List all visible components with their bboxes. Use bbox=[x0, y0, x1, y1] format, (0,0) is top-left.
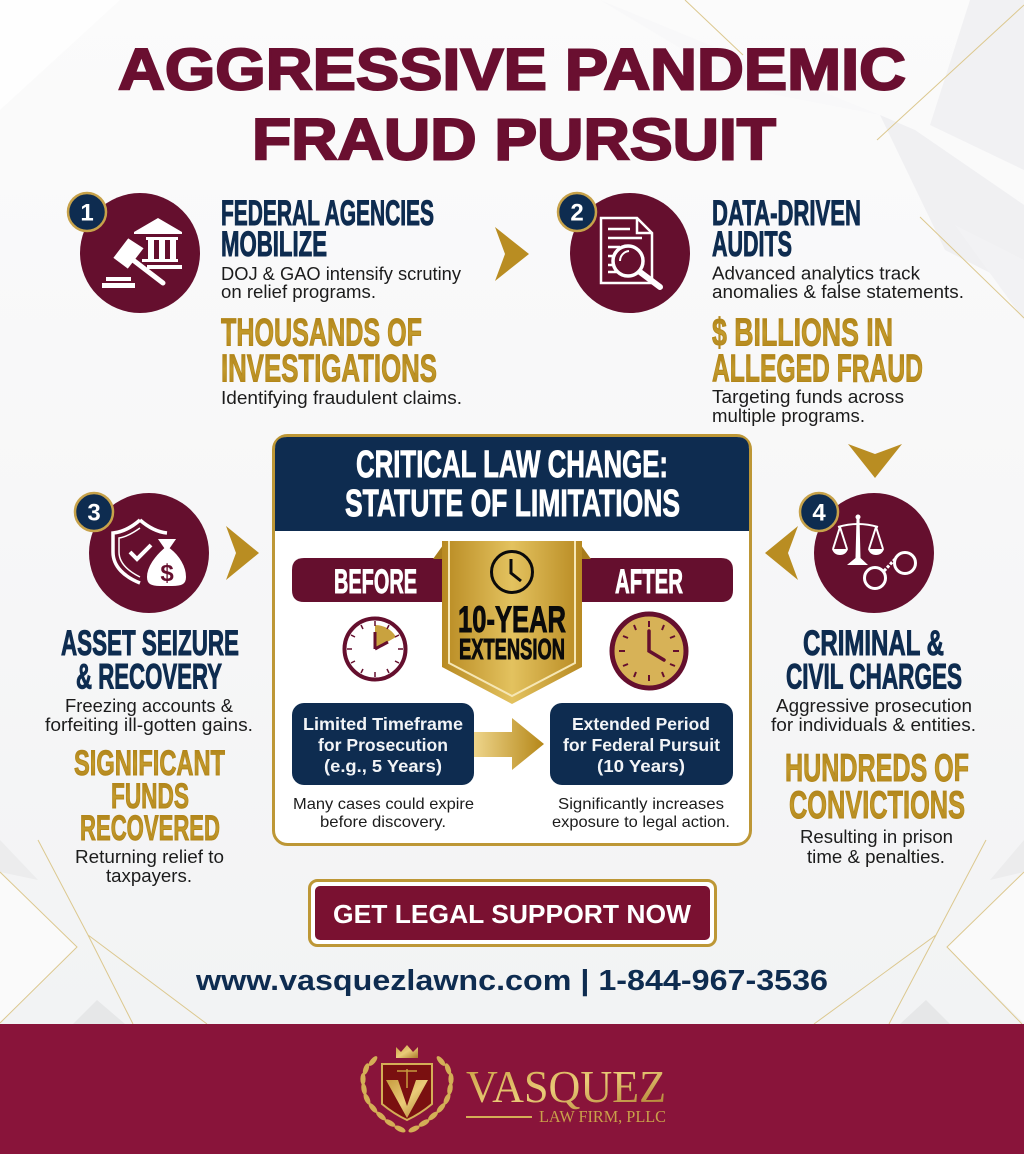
step 2 stat bbox=[712, 312, 923, 390]
step 3 stat: FUNDS bbox=[111, 777, 189, 816]
step 1 stat bbox=[221, 312, 437, 390]
step 3 heading: ASSET SEIZURE bbox=[61, 624, 239, 663]
step 4 stat note bbox=[800, 827, 953, 867]
step 3 heading bbox=[61, 624, 239, 696]
after note: exposure to legal action. bbox=[552, 814, 730, 831]
before note: Many cases could expire bbox=[293, 796, 474, 813]
after bar bbox=[582, 558, 733, 602]
after note: Significantly increases bbox=[558, 796, 724, 813]
step 1 stat: INVESTIGATIONS bbox=[221, 348, 437, 390]
step 3 stat: RECOVERED bbox=[80, 809, 220, 848]
panel header: CRITICAL LAW CHANGE: bbox=[356, 444, 668, 486]
step 2 stat: $ BILLIONS IN bbox=[712, 312, 893, 354]
step 1 heading: MOBILIZE bbox=[221, 225, 327, 264]
step 1 heading: FEDERAL AGENCIES bbox=[221, 194, 434, 233]
step 3 description: Freezing accounts & bbox=[65, 696, 233, 716]
box: extended period: Extended Period bbox=[572, 714, 710, 734]
step 2 description bbox=[712, 264, 964, 302]
step 4 badge: 4 bbox=[812, 500, 826, 526]
step 4 stat note: time & penalties. bbox=[807, 847, 945, 867]
icon: clock on badge bbox=[492, 552, 532, 592]
step 3 badge bbox=[75, 493, 113, 531]
panel: statute of limitations bbox=[274, 436, 750, 844]
before bar: BEFORE bbox=[334, 563, 417, 601]
step 1 stat: THOUSANDS OF bbox=[221, 312, 422, 354]
step 2 description: anomalies & false statements. bbox=[712, 282, 964, 302]
step 3 stat: SIGNIFICANT bbox=[74, 744, 225, 783]
panel header bbox=[275, 437, 749, 531]
step 3 stat note: Returning relief to bbox=[75, 847, 224, 867]
step 2 description: Advanced analytics track bbox=[712, 264, 921, 284]
logo: wordmark: LAW FIRM, PLLC bbox=[539, 1107, 666, 1126]
step 1 heading bbox=[221, 194, 434, 264]
title: FRAUD PURSUIT bbox=[252, 108, 776, 172]
step 4 description: for individuals & entities. bbox=[771, 715, 976, 735]
arrow: step 4 to panel bbox=[765, 526, 798, 580]
step 4 stat bbox=[785, 747, 969, 827]
step 4 heading: CRIMINAL & bbox=[803, 624, 944, 663]
before bar bbox=[292, 558, 443, 602]
badge: 10-year extension bbox=[433, 541, 591, 704]
box: limited timeframe: (e.g., 5 Years) bbox=[324, 756, 442, 776]
badge: 10-year extension: EXTENSION bbox=[459, 634, 565, 666]
title: AGGRESSIVE PANDEMIC bbox=[118, 38, 906, 102]
panel header: STATUTE OF LIMITATIONS bbox=[345, 483, 680, 525]
step 3 icon: shield and money bag: $ bbox=[160, 560, 174, 587]
step 3 badge: 3 bbox=[87, 500, 101, 526]
step 2 stat note bbox=[712, 387, 904, 426]
icon: after clock bbox=[612, 614, 686, 688]
step 3 heading: & RECOVERY bbox=[76, 658, 222, 696]
icon: before clock bbox=[344, 618, 406, 680]
step 3 stat note: taxpayers. bbox=[106, 866, 192, 886]
step 2 heading bbox=[712, 194, 861, 264]
step 3 stat bbox=[74, 744, 225, 848]
contact line: www.vasquezlawnc.com | 1-844-967-3536 bbox=[195, 965, 828, 997]
before note: before discovery. bbox=[320, 814, 446, 831]
step 1 description bbox=[221, 264, 461, 302]
step 3 description: forfeiting ill-gotten gains. bbox=[45, 715, 253, 735]
box: extended period bbox=[550, 703, 733, 785]
arrow: step 3 to panel bbox=[226, 526, 259, 580]
call to action button: GET LEGAL SUPPORT NOW bbox=[333, 899, 691, 929]
step 1 badge: 1 bbox=[80, 200, 94, 226]
step 3 stat note bbox=[75, 847, 224, 886]
after bar: AFTER bbox=[615, 563, 683, 601]
step 2 heading: AUDITS bbox=[712, 225, 792, 264]
step 1 description: DOJ & GAO intensify scrutiny bbox=[221, 264, 461, 284]
step 1 badge bbox=[68, 193, 106, 231]
box: limited timeframe: for Prosecution bbox=[318, 735, 448, 755]
step 3 description bbox=[45, 696, 253, 735]
arrow: step 2 to 4 bbox=[848, 444, 902, 478]
step 2 icon: document and magnifier bbox=[570, 193, 690, 313]
box: limited timeframe: Limited Timeframe bbox=[303, 714, 463, 734]
step 4 heading bbox=[786, 624, 962, 696]
arrow: before to after bbox=[474, 718, 544, 770]
step 4 description: Aggressive prosecution bbox=[776, 696, 972, 716]
step 4 stat note: Resulting in prison bbox=[800, 827, 953, 847]
step 2 stat note: multiple programs. bbox=[712, 406, 865, 426]
step 1 description: on relief programs. bbox=[221, 282, 376, 302]
arrow: step 1 to 2 bbox=[495, 227, 529, 281]
step 1 icon: gavel and courthouse bbox=[80, 193, 200, 313]
step 2 badge bbox=[558, 193, 596, 231]
box: extended period: for Federal Pursuit bbox=[563, 735, 720, 755]
step 4 icon: scales and handcuffs bbox=[814, 493, 934, 613]
after note bbox=[552, 796, 730, 831]
step 3 icon: shield and money bag bbox=[89, 493, 209, 613]
box: limited timeframe bbox=[292, 703, 474, 785]
call to action button bbox=[310, 880, 716, 946]
step 4 description bbox=[771, 696, 976, 735]
box: extended period: (10 Years) bbox=[597, 756, 685, 776]
badge: 10-year extension: 10-YEAR bbox=[458, 599, 566, 640]
logo: wordmark: VASQUEZ bbox=[466, 1061, 666, 1112]
step 4 badge bbox=[800, 493, 838, 531]
step 1 stat note: Identifying fraudulent claims. bbox=[221, 388, 462, 408]
before note bbox=[293, 796, 474, 831]
step 2 stat note: Targeting funds across bbox=[712, 387, 904, 407]
logo: crest bbox=[360, 1045, 454, 1134]
footer band bbox=[0, 1024, 1024, 1154]
step 2 badge: 2 bbox=[570, 200, 584, 226]
title bbox=[118, 38, 906, 172]
step 2 heading: DATA-DRIVEN bbox=[712, 194, 861, 233]
